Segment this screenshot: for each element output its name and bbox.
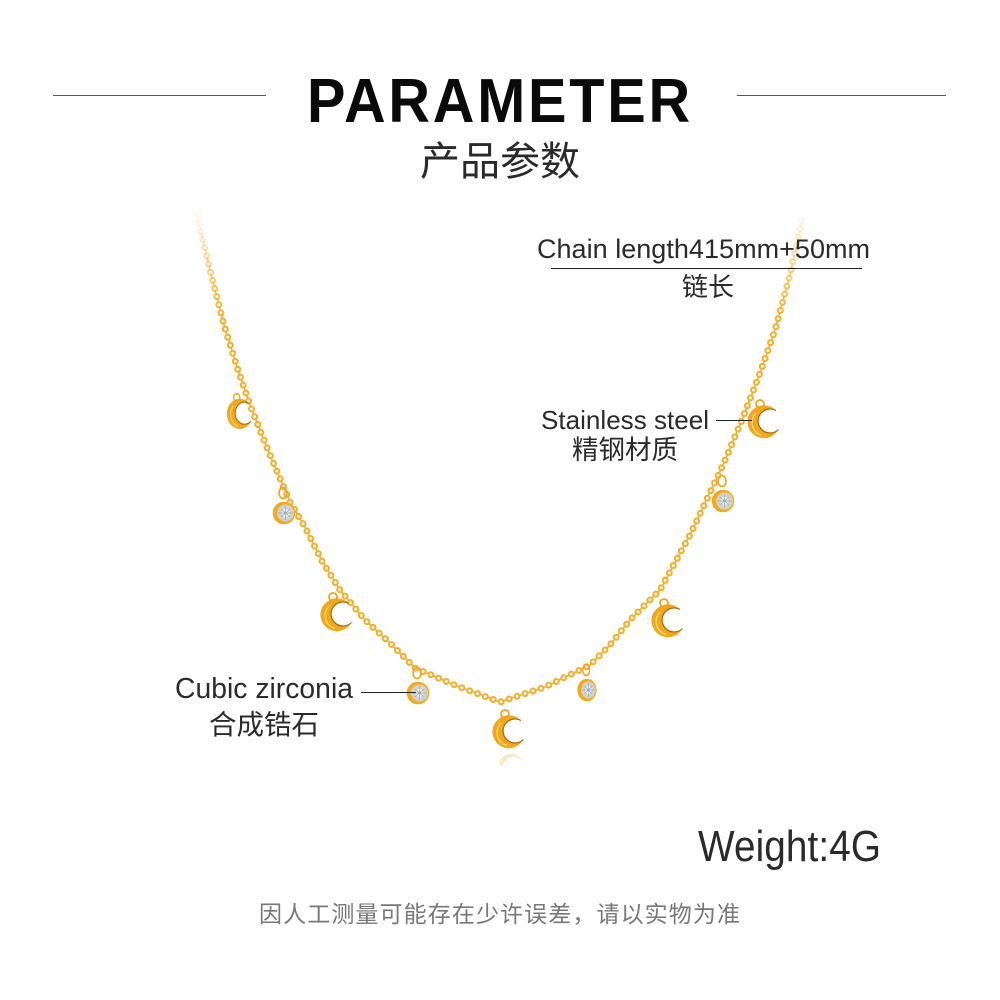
label: cubic zirconia [175,672,416,740]
charm: zirconia 2 [273,488,295,524]
charm: moon 9 [747,400,778,438]
charm: moon 1 [227,394,251,429]
footnote: 因人工测量可能存在少许误差，请以实物为准 [259,901,740,927]
label: cubic zirconia: Cubic zirconia [175,672,353,704]
charm: moon 5 [492,710,524,748]
charm: zirconia 8 [712,476,734,512]
label: chain length [537,234,870,302]
weight: Weight:4G [698,821,881,871]
label: stainless steel: 精钢材质 [572,435,678,465]
moon reflection [499,754,523,767]
necklace chain [197,215,803,702]
charm: moon 3 [320,593,352,631]
left title rule [53,94,266,96]
label: chain length: 链长 [682,272,734,302]
title: PARAMETER [307,66,690,135]
charm: zirconia 6 [577,664,597,701]
subtitle: 产品参数 [420,140,580,184]
label: cubic zirconia: 合成锆石 [209,709,319,740]
label: stainless steel [541,405,752,465]
right title rule [737,94,946,96]
charm: zirconia 4 [407,668,429,704]
label: stainless steel: Stainless steel [541,405,709,435]
label: chain length: Chain length415mm+50mm [537,234,870,264]
charm: moon 7 [651,599,682,637]
